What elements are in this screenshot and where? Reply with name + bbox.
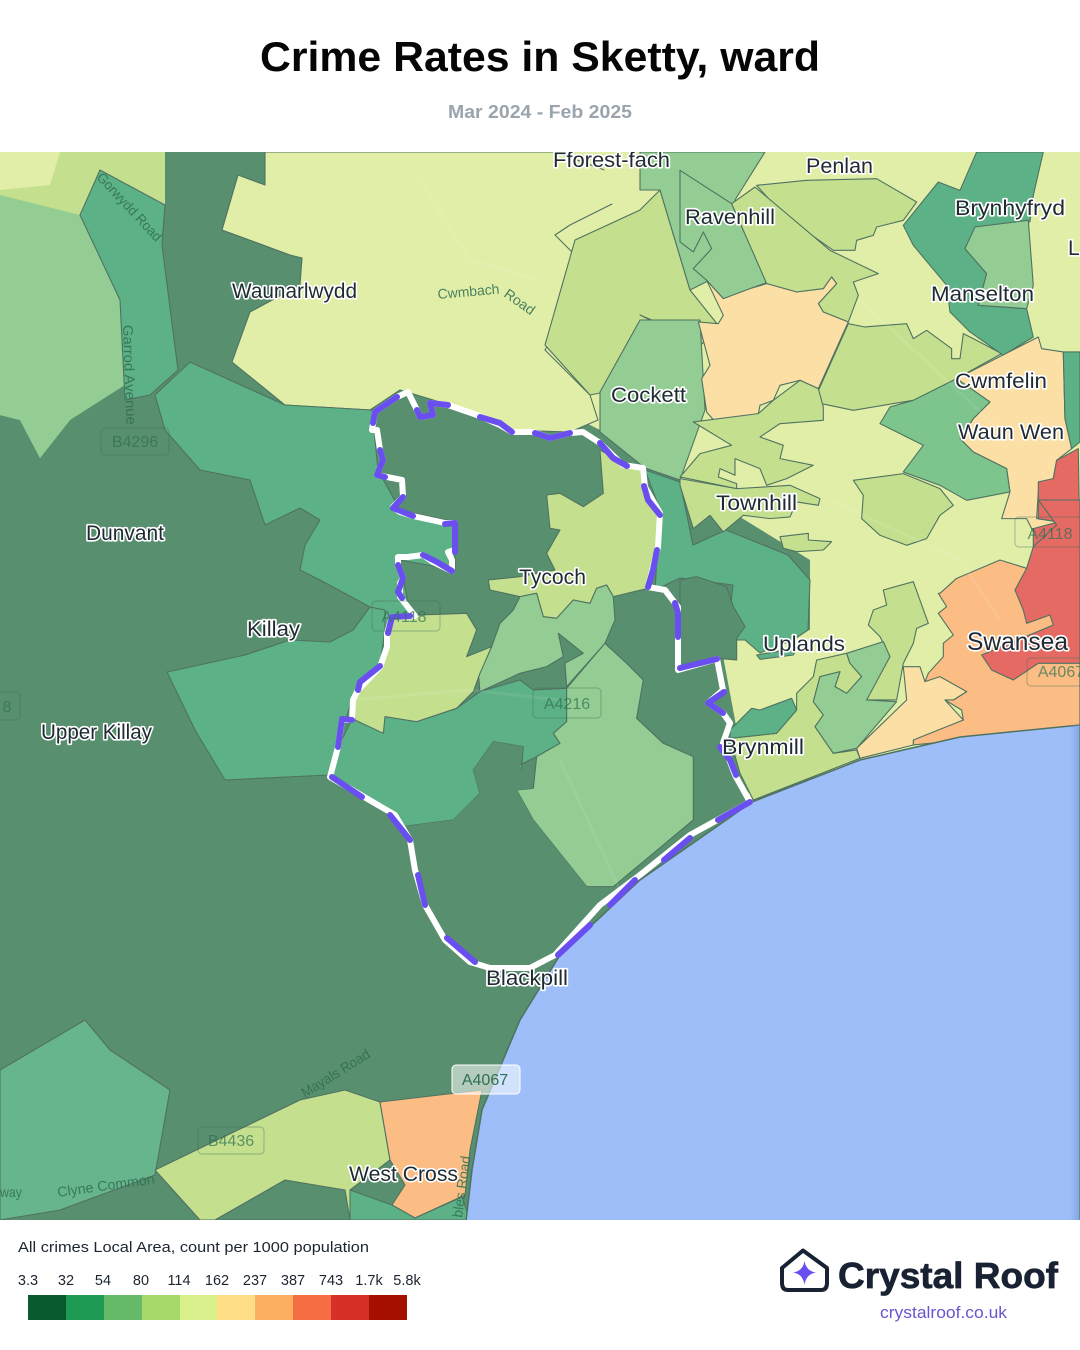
road name labels: way bbox=[0, 1184, 22, 1200]
logo wordmark: Crystal Roof bbox=[838, 1255, 1059, 1296]
sea bbox=[465, 725, 1080, 1230]
road number badges: A4216 bbox=[544, 696, 590, 713]
road number badges: A4118 bbox=[1027, 526, 1073, 543]
map edge shading bbox=[1072, 725, 1080, 1220]
place name labels bbox=[41, 149, 1080, 1186]
map regions: north-east districts bbox=[680, 152, 1080, 552]
legend value labels: 32 bbox=[58, 1273, 74, 1289]
place name labels: Swansea bbox=[967, 628, 1068, 656]
legend value labels: 237 bbox=[243, 1273, 267, 1289]
place name labels: Townhill bbox=[716, 492, 797, 515]
logo url: crystalroof.co.uk bbox=[880, 1304, 1008, 1322]
road name labels: bles Road bbox=[449, 1155, 474, 1218]
title: Crime Rates in Sketty, ward bbox=[260, 33, 820, 80]
road name labels: Garrod Avenue bbox=[120, 325, 139, 425]
ward boundary white line bbox=[330, 392, 750, 968]
place name labels: Manselton bbox=[931, 283, 1034, 306]
map regions: west and north bbox=[0, 152, 1080, 800]
road number badges: A4118 bbox=[381, 609, 427, 626]
road name labels: Clyne Common bbox=[56, 1170, 155, 1200]
place name labels: Tycoch bbox=[519, 566, 586, 589]
map regions: east base bbox=[600, 152, 1080, 800]
place name labels: Penlan bbox=[806, 155, 873, 178]
place name labels: Uplands bbox=[763, 633, 845, 656]
place name labels: Waunarlwydd bbox=[232, 280, 357, 303]
road number badges bbox=[0, 428, 1080, 1154]
legend value labels: 80 bbox=[133, 1273, 149, 1289]
icon: house with star bbox=[782, 1250, 827, 1290]
place name labels: Ravenhill bbox=[685, 206, 775, 229]
legend value labels: 54 bbox=[95, 1273, 111, 1289]
place name labels: L bbox=[1068, 237, 1080, 260]
road name labels: Cwmbach bbox=[437, 281, 500, 302]
legend value labels: 387 bbox=[281, 1273, 305, 1289]
legend value labels: 3.3 bbox=[18, 1273, 38, 1289]
road name labels bbox=[0, 169, 538, 1218]
place name labels: Waun Wen bbox=[958, 421, 1064, 444]
ward boundary purple dashes bbox=[332, 397, 750, 962]
place name labels: West Cross bbox=[349, 1163, 458, 1186]
road number badges: B4436 bbox=[208, 1133, 254, 1150]
road badge: A4067 bbox=[452, 1065, 520, 1094]
map regions: south-west bbox=[0, 1020, 482, 1220]
place name labels: Blackpill bbox=[486, 967, 568, 990]
map roads bbox=[472, 324, 1000, 888]
legend value labels: 743 bbox=[319, 1273, 343, 1289]
legend value labels: 114 bbox=[167, 1273, 191, 1289]
road badge: A4067: A4067 bbox=[462, 1072, 508, 1089]
legend value labels: 162 bbox=[205, 1273, 229, 1289]
logo: Crystal Roof bbox=[782, 1250, 1059, 1322]
place name labels: Upper Killay bbox=[41, 721, 152, 744]
map regions: south-east districts bbox=[680, 500, 1080, 800]
legend colour scale bbox=[28, 1295, 407, 1320]
place name labels: Killay bbox=[247, 618, 301, 641]
place name labels: Cockett bbox=[611, 384, 686, 407]
road name labels: Gorwydd Road bbox=[94, 169, 166, 244]
legend value labels bbox=[18, 1273, 421, 1289]
road number badges: B4296 bbox=[112, 434, 158, 451]
road name labels: Mayals Road bbox=[298, 1046, 373, 1101]
legend value labels: 1.7k bbox=[355, 1273, 383, 1289]
place name labels: Fforest-fach bbox=[553, 149, 670, 172]
legend bbox=[18, 1239, 421, 1320]
place name labels: Brynmill bbox=[722, 736, 804, 759]
subtitle: date range: Mar 2024 - Feb 2025 bbox=[448, 101, 632, 122]
place name labels: Brynhyfryd bbox=[955, 197, 1065, 220]
place name labels: Dunvant bbox=[86, 522, 164, 545]
ward boundary: Sketty bbox=[330, 392, 750, 968]
map regions: inside the ward bbox=[334, 450, 694, 887]
road number badges: 8 bbox=[3, 699, 12, 716]
map regions: mid green east of ward bbox=[645, 470, 810, 653]
road name labels: Road bbox=[501, 285, 538, 318]
legend title: All crimes Local Area, count per 1000 population bbox=[18, 1239, 369, 1256]
place name labels: Cwmfelin bbox=[955, 370, 1047, 393]
legend value labels: 5.8k bbox=[393, 1273, 421, 1289]
